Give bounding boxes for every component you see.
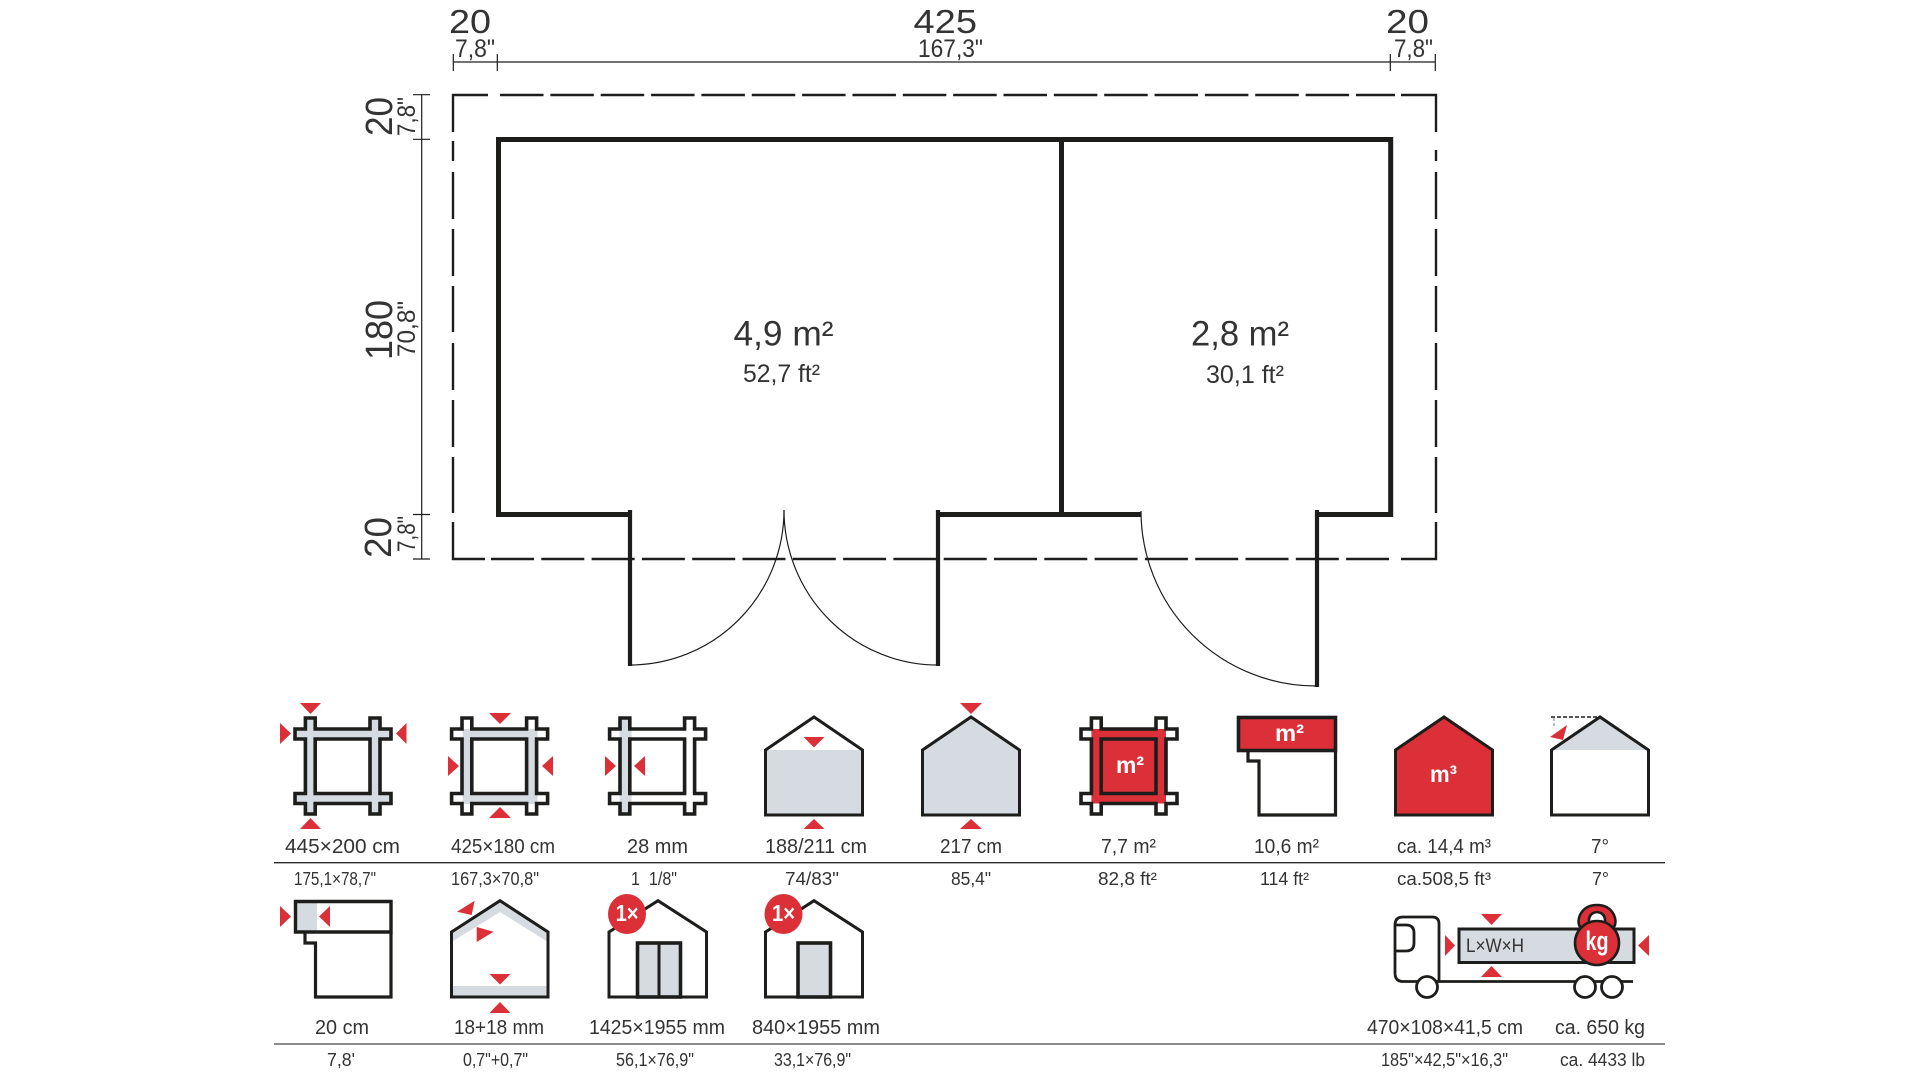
text row 1: metric values: 445×200 cm xyxy=(285,836,400,858)
weight: kg xyxy=(1586,926,1608,956)
text row 2: metric values xyxy=(315,1017,1645,1039)
dimension labels: 70,8" xyxy=(393,301,421,357)
icon: roof area xyxy=(1238,718,1336,815)
dimension labels: 20 xyxy=(358,517,400,558)
text row 1: imperial values: 74/83" xyxy=(785,869,839,889)
icon: roof pitch xyxy=(1550,717,1648,815)
door swing arcs xyxy=(630,510,1316,686)
left dimensions xyxy=(358,95,430,559)
text row 2: imperial values xyxy=(327,1050,1645,1070)
icon: single door: 1× xyxy=(772,900,795,926)
package xyxy=(1459,929,1634,962)
room area: left room: 52,7 ft² xyxy=(743,360,820,388)
room area: right room: 2,8 m² xyxy=(1191,314,1289,354)
icon: double door xyxy=(608,894,706,997)
room area: right room xyxy=(1191,314,1289,389)
text row 1: metric values: 28 mm xyxy=(627,836,688,858)
dimension labels: 167,3" xyxy=(918,35,983,63)
text row 1: metric values xyxy=(285,836,1609,858)
text row 1: imperial values: 175,1×78,7" xyxy=(294,869,376,889)
room area: right room: 30,1 ft² xyxy=(1206,361,1284,389)
icon: interior floor area xyxy=(1081,718,1177,814)
dimension labels: 7,8" xyxy=(1394,35,1433,63)
text row 2: metric values: 1425×1955 mm xyxy=(589,1017,725,1039)
room area: left room xyxy=(734,314,834,388)
roof overhang dashed outline xyxy=(453,95,1436,559)
dimension labels: 425 xyxy=(914,3,977,40)
dimension labels xyxy=(449,3,1433,63)
text row 1: imperial values: 85,4" xyxy=(951,869,991,889)
icon: volume: m³ xyxy=(1430,761,1457,787)
text row 1: metric values: ca. 14,4 m³ xyxy=(1397,836,1491,858)
icon: roof overhang xyxy=(280,902,391,997)
dimension line xyxy=(413,95,430,559)
weight xyxy=(1575,905,1619,965)
icon: outer dimensions xyxy=(280,703,406,829)
floor plan xyxy=(453,95,1436,687)
dimension labels: 7,8" xyxy=(393,516,421,552)
truck cab xyxy=(1395,917,1633,982)
text row 1: imperial values: 7° xyxy=(1592,869,1609,889)
text row 2: metric values: 20 cm xyxy=(315,1017,369,1039)
text row 1: imperial values: 167,3×70,8" xyxy=(451,869,539,889)
icon: double door: 1× xyxy=(616,900,639,926)
text row 1: metric values: 10,6 m² xyxy=(1254,836,1319,858)
text row 2: metric values: 470×108×41,5 cm xyxy=(1367,1017,1523,1039)
text row 2: metric values: 18+18 mm xyxy=(454,1017,544,1039)
text row 1: imperial values xyxy=(294,869,1609,889)
dimension labels xyxy=(358,97,421,558)
icon: wall height xyxy=(766,717,862,829)
text row 1: imperial values: 1 1/8" xyxy=(631,869,677,889)
dimension labels: 20 xyxy=(1386,3,1429,40)
dimension labels: 20 xyxy=(449,3,491,40)
icon: truck with package: L×W×H xyxy=(1466,936,1524,957)
text row 2: imperial values: 33,1×76,9" xyxy=(774,1050,851,1070)
icon: floor and roof board thickness xyxy=(452,901,548,1013)
dimension labels: 20 xyxy=(359,97,401,136)
text row 2: imperial values: 7,8' xyxy=(327,1050,355,1070)
text row 1: imperial values: ca.508,5 ft³ xyxy=(1397,869,1491,889)
wheels xyxy=(1416,976,1622,998)
icon: single door xyxy=(764,894,862,997)
icon: volume xyxy=(1396,717,1492,815)
text row 2: metric values: 840×1955 mm xyxy=(752,1017,880,1039)
dimension line xyxy=(453,54,1436,71)
room area: left room: 4,9 m² xyxy=(734,314,834,354)
text row 2: imperial values: ca. 4433 lb xyxy=(1560,1050,1645,1070)
text row 2: metric values: ca. 650 kg xyxy=(1555,1017,1645,1039)
text row 1: metric values: 188/211 cm xyxy=(765,836,867,858)
dimension labels: 7,8" xyxy=(455,35,495,63)
text row 1: metric values: 7° xyxy=(1591,836,1609,858)
door jambs xyxy=(630,510,1317,687)
dimension labels: 180 xyxy=(359,300,401,360)
icon: roof area: m² xyxy=(1275,720,1304,746)
icon: wall dimensions xyxy=(448,713,553,818)
text row 1: imperial values: 82,8 ft² xyxy=(1098,869,1157,889)
icon: ridge height xyxy=(922,703,1020,829)
icon: wall thickness xyxy=(605,718,706,814)
text row 1: metric values: 7,7 m² xyxy=(1101,836,1156,858)
icon: truck with package xyxy=(1395,905,1649,998)
arrows xyxy=(1445,914,1649,977)
text row 1: metric values: 425×180 cm xyxy=(451,836,555,858)
top dimensions xyxy=(449,3,1436,71)
text row 2: imperial values: 0,7"+0,7" xyxy=(463,1050,528,1070)
text row 1: imperial values: 114 ft² xyxy=(1260,869,1309,889)
icon: interior floor area: m² xyxy=(1116,752,1144,778)
text row 2: imperial values: 185"×42,5"×16,3" xyxy=(1381,1050,1508,1070)
text row 2: imperial values: 56,1×76,9" xyxy=(616,1050,694,1070)
walls xyxy=(498,140,1391,514)
dimension labels: 7,8" xyxy=(393,97,421,136)
text row 1: metric values: 217 cm xyxy=(940,836,1002,858)
